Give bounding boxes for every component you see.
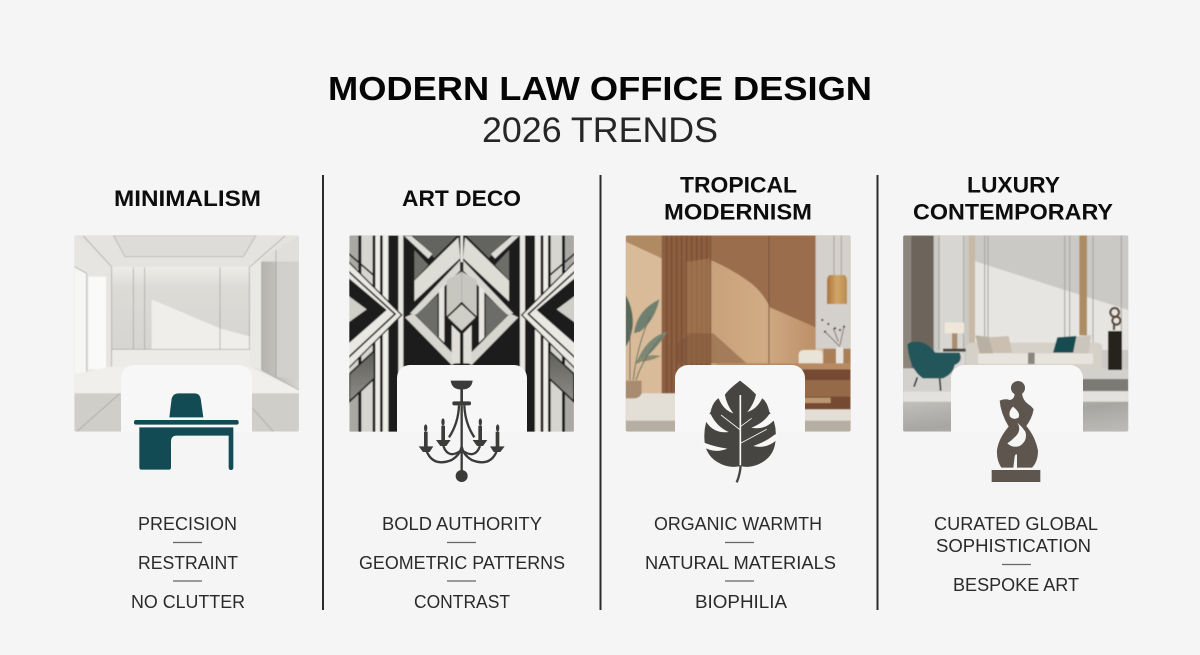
panel: art deco <box>345 186 578 612</box>
list: art deco traits <box>359 514 565 612</box>
list: art deco traits: GEOMETRIC PATTERNS <box>359 553 565 573</box>
list: tropical modernism traits <box>645 514 836 612</box>
list: art deco traits: CONTRAST <box>414 592 510 612</box>
icon card <box>951 365 1083 432</box>
list: luxury contemporary traits: CURATED GLOBAL <box>934 514 1098 534</box>
column divider <box>600 175 602 610</box>
list: art deco traits: BOLD AUTHORITY <box>382 514 542 534</box>
icon: abstract sculpture <box>992 381 1040 482</box>
icon: chandelier <box>419 381 505 482</box>
image: art deco pattern <box>345 230 578 437</box>
image: minimalist interior <box>70 230 303 437</box>
title <box>328 70 872 150</box>
icon card <box>121 365 252 432</box>
list: minimalism traits: PRECISION <box>138 514 237 534</box>
list: luxury contemporary traits <box>934 514 1098 595</box>
heading: luxury contemporary: CONTEMPORARY <box>913 200 1113 224</box>
icon card <box>397 365 527 432</box>
panel: luxury contemporary <box>898 172 1131 595</box>
list: tropical modernism traits: ORGANIC WARMTH <box>654 514 822 534</box>
list: luxury contemporary traits: SOPHISTICATION <box>936 536 1091 556</box>
heading: tropical modernism: TROPICAL <box>680 172 797 198</box>
title: MODERN LAW OFFICE DESIGN <box>328 70 872 107</box>
heading: luxury contemporary <box>913 172 1113 224</box>
image: luxury interior <box>898 230 1131 437</box>
list: minimalism traits <box>131 514 245 612</box>
image: tropical interior <box>620 230 853 437</box>
icon: monstera leaf <box>703 381 777 482</box>
list: tropical modernism traits: NATURAL MATERIALS <box>645 553 836 573</box>
list: minimalism traits: RESTRAINT <box>138 553 238 573</box>
list: tropical modernism traits: BIOPHILIA <box>695 592 787 612</box>
panel: minimalism <box>70 186 303 612</box>
title: 2026 TRENDS <box>482 111 718 150</box>
icon card <box>675 365 805 432</box>
heading: tropical modernism <box>664 172 812 224</box>
heading: art deco: ART DECO <box>402 186 521 211</box>
list: minimalism traits: NO CLUTTER <box>131 592 245 612</box>
heading: luxury contemporary: LUXURY <box>967 172 1060 198</box>
icon: desk and chair <box>134 393 239 470</box>
heading: minimalism: MINIMALISM <box>114 186 261 211</box>
list: luxury contemporary traits: BESPOKE ART <box>953 575 1079 595</box>
panel: tropical modernism <box>620 172 853 612</box>
column divider <box>876 175 878 610</box>
column divider <box>322 175 324 610</box>
heading: tropical modernism: MODERNISM <box>664 200 812 224</box>
